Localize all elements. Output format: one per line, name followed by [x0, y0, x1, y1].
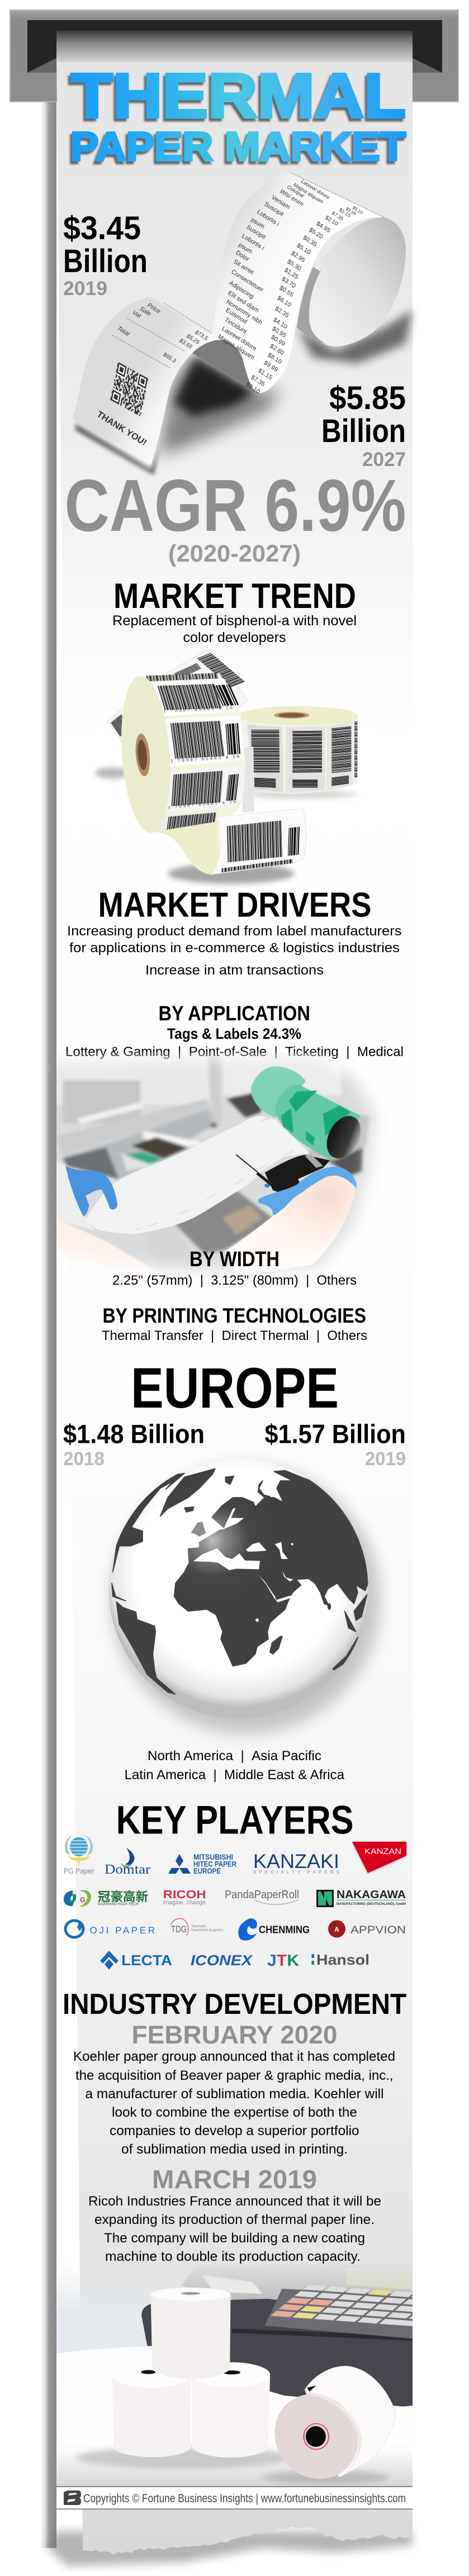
stat: 2027 market size: $5.85 [329, 380, 406, 416]
logo: Hansol: Hansol [316, 1951, 369, 1968]
development: February 2020 [73, 2021, 395, 2157]
stat: 2027 market size: Billion [321, 413, 406, 449]
receipt line items: $0.95 [271, 325, 287, 339]
wall [56, 2262, 354, 2354]
logo: Iconex: ICONEX [191, 1952, 253, 1969]
stat: 2019 market size [63, 210, 148, 300]
market trend heading and text: MARKET TREND [113, 577, 356, 616]
logo: PG Paper: PG Paper [64, 1866, 94, 1875]
receipt line items: Suscipit [263, 201, 285, 218]
receipt line items: $2.10 [324, 215, 339, 227]
right arm [225, 1173, 354, 1276]
receipt line items: $0.55 [278, 284, 295, 298]
logo: Kanzan: KANZAN [364, 1847, 401, 1856]
development: March 2019: machine to double its production capacity. [105, 2249, 361, 2264]
receipt line items: psum [249, 216, 266, 230]
logo: Domtar: Domtar [105, 1862, 150, 1877]
CAGR figure: CAGR 6.9% [65, 464, 406, 546]
main barcode roll: 1 70987 65465 4 56 [168, 799, 236, 810]
receipt line items: $5.30 [286, 258, 302, 272]
title [70, 61, 406, 169]
keypad [271, 2284, 413, 2327]
receipt line items: Suscipit [245, 224, 267, 241]
logo: Domtar [105, 1848, 150, 1877]
seas [193, 1508, 293, 1622]
europe heading and values: $1.48 Billion [63, 1419, 205, 1448]
table top [56, 2346, 413, 2487]
roll top [151, 2288, 231, 2379]
by printing technologies segment: Thermal Transfer | Direct Thermal | Others [102, 1328, 367, 1343]
logo: Oji Paper: OJI PAPER [89, 1925, 155, 1936]
development: February 2020: look to combine the expertise of both the [112, 2105, 357, 2120]
by application segment: Tags & Labels 24.3% [167, 1025, 301, 1042]
logo: PG Paper [64, 1835, 94, 1875]
logo: Oji Paper [65, 1921, 155, 1937]
logo: JTK: JTK [267, 1952, 299, 1970]
thermal paper sheet [56, 63, 413, 2555]
footer copyright bar: Copyrights © Fortune Business Insights | www.fortunebusinessinsights.com [83, 2492, 406, 2505]
receipt line items: $1.15 [338, 207, 352, 218]
logo: Guanhao High-Tech [64, 1890, 148, 1907]
logo: Kanzaki: SPECIALTY PAPERS [253, 1870, 339, 1875]
logo: Telemark Diversified Graphics: Diversified Graphics [191, 1928, 224, 1932]
title: THERMAL [71, 61, 406, 131]
other regions [125, 1748, 345, 1783]
receipt line items: $1.25 [283, 267, 300, 281]
development: February 2020: FEBRUARY 2020 [132, 2021, 338, 2049]
receipt line items: Elit sed diam [226, 289, 260, 314]
logo: Nakagawa: MANUFACTURING (DEUTSCHLAND), GmbH [337, 1903, 406, 1906]
receipt line items: psum [237, 241, 254, 255]
receipt line items: $65.3 [162, 351, 177, 364]
cash register [182, 2268, 413, 2300]
illustration: curling receipt [73, 173, 413, 475]
logo: Appvion: APPVION [350, 1924, 406, 1936]
receipt line items: Adipiscing [228, 279, 255, 300]
receipt line items: Magna aliquam [292, 182, 325, 205]
receipt line items: $5.10 [352, 205, 364, 216]
receipt line items: $3.70 [280, 275, 297, 289]
receipt line items: $0.99 [269, 334, 286, 348]
illustration: barcode label rolls [95, 648, 358, 884]
other regions: North America | Asia Pacific [148, 1748, 321, 1764]
development: February 2020: of sublimation media used in printing. [121, 2142, 348, 2157]
main barcode roll [116, 673, 245, 834]
receipt line items: Price [146, 302, 162, 315]
roll lying on its side [274, 2366, 396, 2479]
key players heading: KEY PLAYERS [116, 1799, 354, 1843]
peeled barcode label [155, 809, 306, 874]
logo: Kanzan [352, 1842, 407, 1874]
receipt line items: Colutpat [286, 184, 305, 199]
stat: 2019 market size: 2019 [63, 278, 107, 300]
receipt line items: $7.35 [331, 210, 344, 222]
main barcode roll: 1 70987 65465 4 56 [163, 705, 233, 714]
market trend heading and text: Replacement of bisphenol-a with novel [112, 613, 357, 629]
receipt line items: $9.99 [345, 206, 357, 217]
logo: Mitsubishi Hitec Paper Europe [168, 1852, 236, 1875]
receipt line items [116, 178, 364, 395]
development: March 2019: MARCH 2019 [152, 2165, 317, 2194]
receipt line items: Lobortis i [240, 232, 266, 251]
green roll [251, 1066, 367, 1162]
by width segment: 2.25" (57mm) | 3.125" (80mm) | Others [112, 1273, 357, 1288]
market drivers heading and text: MARKET DRIVERS [98, 886, 371, 925]
left arm sleeve [56, 1219, 151, 1272]
europe heading and values: EUROPE [131, 1356, 339, 1420]
logo: Nakagawa [316, 1889, 406, 1907]
receipt line items: Sale [138, 305, 152, 317]
QR code [111, 362, 148, 416]
thermal paper sheet [86, 1116, 309, 1234]
logo: Mitsubishi Hitec Paper Europe: MITSUBISHI [193, 1852, 233, 1861]
development: March 2019: Ricoh Industries France announced that it will be [88, 2194, 381, 2209]
receipt line items: Consectetuer [230, 268, 265, 293]
europe heading and values [63, 1356, 406, 1470]
paper drop shadow [40, 101, 413, 2566]
development: February 2020: companies to develop a superior portfolio [110, 2123, 359, 2138]
logo: Mitsubishi Hitec Paper Europe: HITEC PAPER [193, 1860, 236, 1869]
receipt line items: Laoreet dolore [300, 178, 330, 200]
receipt line items: Total [116, 325, 131, 338]
other regions: Latin America | Middle East & Africa [125, 1767, 345, 1783]
receipt line items: $2.95 [290, 250, 306, 264]
thank you note: THANK YOU! [95, 410, 148, 448]
market drivers heading and text: Increasing product demand from label manufacturers [67, 924, 401, 939]
logo: Appvion: A [334, 1926, 339, 1933]
back roll [238, 706, 358, 794]
market trend heading and text [112, 577, 357, 645]
logo: Mitsubishi Hitec Paper Europe: EUROPE [193, 1866, 221, 1875]
logo: Ricoh: RICOH [163, 1889, 206, 1901]
development: February 2020: a manufacturer of sublimation media. Koehler will [85, 2087, 383, 2102]
receipt line items: $3.55 [178, 338, 193, 350]
receipt line items: Magna aliquam [216, 333, 256, 361]
development: February 2020: Koehler paper group announced that it has completed [73, 2049, 395, 2064]
by width segment [112, 1248, 357, 1288]
by printing technologies segment [102, 1304, 367, 1343]
receipt line items: Wisi enim [278, 188, 305, 208]
receipt line items: $4.10 [272, 316, 288, 330]
roll shadows [77, 2446, 291, 2468]
logo: Guanhao High-Tech: GUANHAO HIGH-TECH [98, 1902, 139, 1907]
receipt line items: $9.99 [262, 359, 279, 373]
logo: Chenming [238, 1918, 310, 1941]
upper loose labels [106, 648, 248, 743]
CAGR figure: (2020-2027) [168, 540, 301, 567]
receipt line items: $1.15 [257, 367, 273, 381]
development: March 2019: The company will be building a new coating [104, 2231, 365, 2246]
receipt line items: $73.5 [193, 329, 209, 342]
development: February 2020: the acquisition of Beaver paper & graphic media, inc., [75, 2068, 394, 2083]
receipt line items: $5.20 [307, 226, 324, 240]
by application segment [65, 1002, 404, 1059]
receipt line items: $6.10 [276, 294, 292, 308]
receipt line items: Nonummy nibh [225, 298, 264, 326]
roll bottom left [112, 2363, 191, 2457]
logo: Lecta [100, 1951, 172, 1970]
logo: Kanzaki: KANZAKI [253, 1851, 339, 1872]
receipt line items: Laoreet dolore [220, 325, 258, 352]
land masses [112, 1468, 368, 1694]
CAGR figure [65, 464, 406, 567]
receipt line items: $2.60 [268, 343, 285, 357]
printer slot housing [10, 9, 459, 102]
receipt line items: Dolor [234, 249, 250, 263]
europe heading and values: 2019 [365, 1448, 406, 1470]
white coat sleeve [56, 1161, 95, 1230]
logo: Ricoh [163, 1889, 207, 1906]
receipt line items: $4.95 [315, 220, 331, 234]
receipt sheet [73, 173, 384, 465]
europe heading and values: 2018 [63, 1448, 105, 1470]
logo: Telemark Diversified Graphics: TDG [171, 1924, 187, 1935]
receipt line items: Tincidunt [223, 316, 248, 335]
roll bottom right [192, 2362, 270, 2458]
logo: Panda Paper Roll: PandaPaperRoll [225, 1889, 299, 1901]
logo: Lecta: LECTA [121, 1952, 172, 1969]
market drivers heading and text: for applications in e-commerce & logistics industries [69, 940, 400, 956]
logo: Ricoh: imagine. change. [163, 1899, 207, 1906]
great britain [191, 1522, 206, 1537]
stat: 2019 market size: $3.45 [63, 210, 141, 246]
receipt line items: $5.25 [185, 333, 201, 346]
photo: thermal paper being cut from a roll [56, 1051, 380, 1275]
logo: Appvion [328, 1920, 406, 1938]
stat: 2027 market size: 2027 [362, 449, 406, 470]
title: PAPER MARKET [70, 125, 406, 169]
by application segment: BY APPLICATION [159, 1002, 310, 1025]
receipt line items: $2.35 [273, 305, 290, 319]
logo: Nakagawa: NAKAGAWA [337, 1889, 406, 1901]
receipt line items: Sit amet [232, 258, 255, 276]
logo: Guanhao High-Tech: G [80, 1896, 85, 1904]
by application segment: Lottery & Gaming | Point-of-Sale | Ticketing | Medical [65, 1044, 404, 1059]
receipt line items: $5.10 [295, 242, 312, 256]
receipt line items: $2.10 [244, 381, 261, 395]
industry development heading: INDUSTRY DEVELOPMENT [63, 1988, 406, 2021]
receipt line items: Lobortis i [255, 208, 281, 227]
by printing technologies segment: BY PRINTING TECHNOLOGIES [103, 1304, 366, 1327]
right blue glove [258, 1167, 357, 1215]
stat: 2027 market size [321, 380, 406, 470]
receipt line items: $8.10 [266, 351, 283, 365]
market drivers heading and text: Increase in atm transactions [145, 963, 324, 978]
left blue glove [65, 1166, 117, 1216]
footer copyright bar [56, 2487, 413, 2510]
black feed pad [265, 1155, 330, 1197]
receipt line items: Euismod [224, 307, 248, 325]
receipt line items: $7.35 [249, 374, 266, 388]
icon: company mark [64, 2491, 81, 2505]
logo: Telemark Diversified Graphics [171, 1918, 224, 1936]
development: March 2019 [88, 2165, 381, 2264]
main barcode roll: 1 70987 65465 4 56 [170, 753, 240, 764]
logo: Chenming: CHENMING [259, 1924, 310, 1936]
logo: Telemark Diversified Graphics: Telemark [191, 1924, 206, 1928]
market trend heading and text: color developers [183, 630, 286, 645]
receipt line items: Vat [131, 309, 143, 320]
globe [108, 1458, 380, 1733]
europe heading and values: $1.57 Billion [265, 1419, 406, 1448]
photo: thermal paper rolls beside a cash register [56, 2260, 461, 2487]
by width segment: BY WIDTH [190, 1248, 279, 1271]
company logos [64, 1835, 407, 1970]
market drivers heading and text [67, 886, 401, 978]
stat: 2019 market size: Billion [63, 243, 148, 279]
logo: Guanhao High-Tech: 冠豪高新 [98, 1890, 148, 1904]
scissors [236, 1155, 273, 1187]
loose sheet behind main roll [242, 747, 254, 813]
development: March 2019: expanding its production of thermal paper line. [94, 2212, 375, 2227]
receipt line items: $0.35 [301, 234, 318, 248]
receipt line items: Veniam [270, 194, 291, 211]
